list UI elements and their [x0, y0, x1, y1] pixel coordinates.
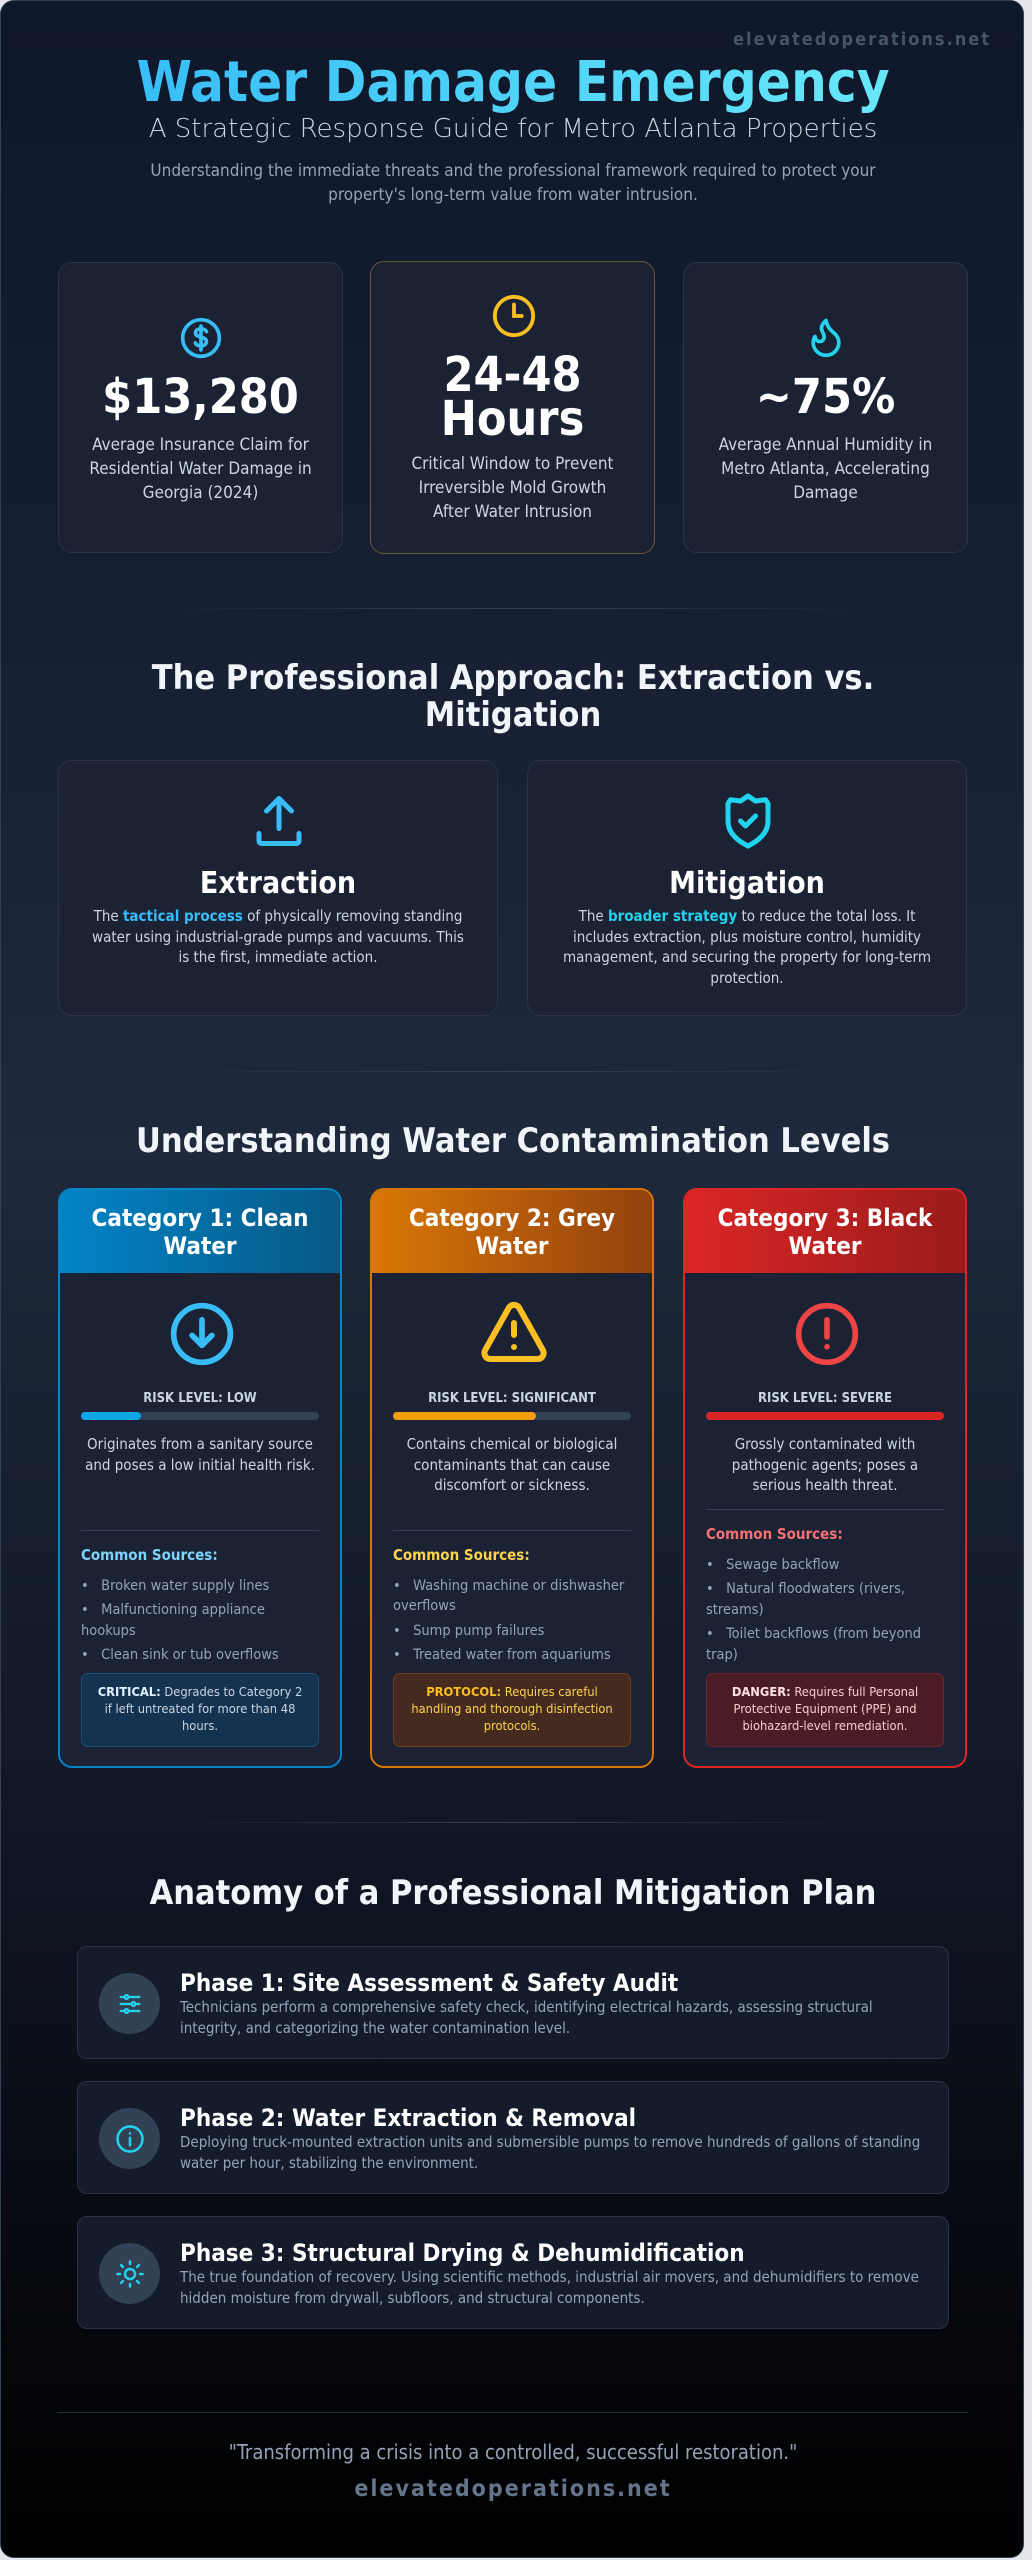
brand tag top: elevatedoperations.net — [733, 29, 991, 50]
panel: category 2: Water — [475, 1232, 549, 1260]
icon: clock — [492, 294, 536, 338]
panel: extraction — [58, 760, 498, 1016]
icon: flame — [811, 318, 841, 358]
panel: category 3: • Sewage backflow — [706, 1556, 839, 1572]
phase 2: Phase 2: Water Extraction & Removal — [180, 2104, 636, 2132]
stat card: humidity: ~75% — [756, 369, 895, 425]
panel: category 2: • Washing machine or dishwasher overflows — [393, 1578, 624, 1614]
panel: category 1: RISK LEVEL: LOW — [143, 1391, 257, 1406]
icon: sliders — [99, 1973, 160, 2034]
footer brand: elevatedoperations.net — [354, 2476, 672, 2502]
phase 1: Technicians perform a comprehensive safety check, identifying electrical hazards, assessing structural integrity, and categorizing the water contamination level. — [180, 1998, 873, 2037]
subtitle: A Strategic Response Guide for Metro Atlanta Properties — [149, 114, 877, 144]
phase 1: Phase 1: Site Assessment & Safety Audit — [180, 1969, 678, 1997]
icon: warning triangle — [481, 1302, 547, 1362]
stat card: insurance claim: $13,280 — [102, 369, 299, 425]
panel: category 3: DANGER: Requires full Personal Protective Equipment (PPE) and biohazard-level remediation. — [732, 1685, 918, 1734]
stat card: critical window: Hours — [441, 391, 584, 447]
panel: category 1: Water — [163, 1232, 237, 1260]
icon: sun — [99, 2243, 160, 2304]
panel: category 1: • Clean sink or tub overflows — [81, 1647, 279, 1663]
panel: category 3: • Toilet backflows (from beyond trap) — [706, 1626, 921, 1662]
panel: category 2: PROTOCOL: Requires careful handling and thorough disinfection protocols. — [411, 1685, 613, 1734]
panel: category 2: Category 2: Grey — [409, 1204, 615, 1232]
panel: category 2: Common Sources: — [393, 1546, 530, 1564]
stat card: insurance claim: Average Insurance Claim for Residential Water Damage in Georgia (2024) — [89, 435, 312, 503]
phase 2: Deploying truck-mounted extraction units and submersible pumps to remove hundreds of gallons of standing water per hour, stabilizing the environment. — [180, 2133, 920, 2172]
icon: arrow down circle — [170, 1302, 234, 1366]
panel: category 3 — [683, 1188, 967, 1768]
icon: dollar — [180, 318, 222, 358]
panel: category 2: RISK LEVEL: SIGNIFICANT — [428, 1391, 596, 1406]
phase 3 — [77, 2216, 949, 2329]
panel: mitigation — [527, 760, 967, 1016]
heading: professional approach: The Professional Approach: Extraction vs. Mitigation — [152, 658, 874, 735]
panel: extraction: The tactical process of physically removing standing water using industrial-grade pumps and vacuums. This is the first, immediate action. — [92, 907, 464, 966]
panel: category 1: hours. — [182, 1719, 218, 1734]
panel: category 3: RISK LEVEL: SEVERE — [758, 1391, 892, 1406]
panel: category 2: Contains chemical or biological contaminants that can cause discomfort or sickness. — [407, 1435, 617, 1494]
icon: alert circle — [796, 1302, 858, 1366]
panel: category 1 — [58, 1188, 342, 1768]
panel: mitigation: The broader strategy to reduce the total loss. It includes extraction, plus moisture control, humidity management, and securing the property for long-term protection. — [563, 907, 931, 986]
panel: category 3: • Natural floodwaters (rivers, streams) — [706, 1581, 905, 1618]
panel: category 3: Category 3: Black — [718, 1204, 932, 1232]
panel: mitigation: Mitigation — [669, 866, 825, 901]
phase 3: Phase 3: Structural Drying & Dehumidification — [180, 2239, 745, 2267]
panel: category 3: Common Sources: — [706, 1525, 843, 1543]
stat card: critical window — [370, 261, 655, 554]
footer quote: "Transforming a crisis into a controlled, successful restoration." — [229, 2440, 797, 2464]
title: Water Damage Emergency — [136, 50, 890, 115]
panel: category 1: • Broken water supply lines — [81, 1578, 269, 1594]
phase 3: The true foundation of recovery. Using scientific methods, industrial air movers, and dehumidifiers to remove hidden moisture from drywall, subfloors, and structural components. — [180, 2268, 919, 2307]
phase 2 — [77, 2081, 949, 2194]
stat card: humidity — [683, 262, 968, 553]
panel: category 3: Water — [788, 1232, 862, 1260]
heading: mitigation plan: Anatomy of a Professional Mitigation Plan — [150, 1873, 876, 1913]
panel: category 2: • Treated water from aquariums — [393, 1647, 611, 1663]
panel: category 1: if left untreated for more than 48 — [105, 1702, 295, 1717]
panel: category 2 — [370, 1188, 654, 1768]
phase 1 — [77, 1946, 949, 2059]
panel: category 2: • Sump pump failures — [393, 1622, 544, 1638]
intro text: Understanding the immediate threats and the professional framework required to protect your property's long-term value from water intrusion. — [150, 161, 876, 205]
panel: extraction: Extraction — [200, 866, 356, 901]
icon: shield check — [726, 794, 770, 848]
panel: category 3: Grossly contaminated with pathogenic agents; poses a serious health threat. — [732, 1435, 918, 1494]
panel: category 1: • Malfunctioning appliance hookups — [81, 1602, 265, 1638]
stat card: insurance claim — [58, 262, 343, 553]
icon: info — [99, 2108, 160, 2169]
panel: category 1: Common Sources: — [81, 1546, 218, 1564]
panel: category 1: Originates from a sanitary source and poses a low initial health risk. — [85, 1435, 315, 1474]
stat card: humidity: Average Annual Humidity in Metro Atlanta, Accelerating Damage — [719, 435, 932, 503]
panel: category 1: CRITICAL: Degrades to Category 2 — [98, 1685, 302, 1700]
icon: upload arrow — [256, 796, 302, 846]
stat card: critical window: 24-48 — [443, 347, 582, 403]
panel: category 1: Category 1: Clean — [92, 1204, 308, 1232]
stat card: critical window: Critical Window to Prevent Irreversible Mold Growth After Water Intrusion — [411, 454, 614, 522]
heading: contamination levels: Understanding Water Contamination Levels — [136, 1121, 890, 1161]
